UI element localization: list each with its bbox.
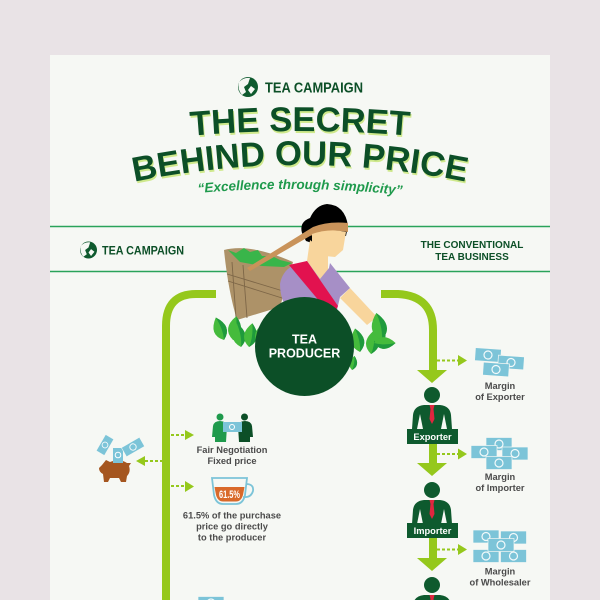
icon: fair negotiation handshake (212, 414, 253, 442)
icon: importer banknotes (471, 438, 528, 470)
icon: neck and arm (307, 240, 377, 325)
flow line: right path with arrow (381, 294, 447, 383)
figure: importer (407, 482, 458, 538)
callout: tea producer: PRODUCER (269, 346, 340, 360)
text: fair negotiation: Fixed price (207, 456, 257, 466)
arrow: dashed to fair negotiation (171, 430, 194, 440)
title (132, 107, 470, 184)
icon: piggy bank with banknotes (96, 435, 145, 482)
text: margin of exporter: Margin (485, 381, 516, 391)
icon: basket (224, 248, 293, 320)
text: margin of wholesaler (470, 566, 531, 588)
icon: sash (289, 261, 338, 310)
text: margin of exporter (475, 381, 525, 402)
tagline: “Excellence through simplicity” (198, 179, 403, 196)
figure: wholesaler (412, 577, 452, 600)
heading: the conventional tea business: TEA BUSINESS (435, 252, 509, 263)
icon: wholesaler banknotes (473, 530, 526, 562)
text: margin of importer: Margin (485, 472, 516, 482)
text: 61.5% to producer (183, 510, 281, 542)
icon: tea cup 61.5% (212, 478, 253, 504)
text: 61.5% to producer: to the producer (198, 532, 266, 542)
heading: the conventional tea business: THE CONVENTIONAL (421, 240, 523, 251)
logo: Tea Campaign column header: TEA CAMPAIGN (102, 244, 184, 258)
title: THE SECRET (189, 107, 412, 138)
callout: tea producer: TEA (292, 332, 317, 346)
logo: Tea Campaign top: TEA CAMPAIGN (265, 80, 363, 96)
title: BEHIND OUR PRICE (132, 141, 470, 184)
icon: carrying strap (247, 222, 348, 271)
arrow: dashed to margin of exporter (437, 355, 467, 366)
callout: tea producer (255, 297, 354, 396)
flow line: left path (166, 294, 216, 600)
text: 61.5% to producer: price go directly (196, 522, 269, 532)
figure: exporter: Exporter (413, 432, 452, 442)
arrow: importer to wholesaler (417, 538, 447, 571)
text: margin of wholesaler: Margin (485, 566, 516, 576)
icon: banknote bottom left (198, 596, 224, 600)
icon: face (312, 230, 346, 257)
logo: Tea Campaign top (238, 77, 363, 97)
arrow: dashed to piggy bank (136, 456, 162, 466)
text: margin of exporter: of Exporter (475, 392, 525, 402)
icon: exporter banknotes (475, 348, 524, 377)
figure: importer: Importer (414, 526, 452, 536)
panel: infographic background (50, 55, 550, 600)
icon: hair (301, 204, 348, 243)
heading: the conventional tea business (421, 240, 523, 263)
icon: shirt (280, 261, 350, 310)
comparison header band (50, 226, 550, 272)
text: fair negotiation (197, 445, 268, 466)
arrow: exporter to importer (417, 444, 447, 476)
text: fair negotiation: Fair Negotiation (197, 445, 268, 455)
arrow: dashed to tea cup (171, 481, 194, 492)
text: 61.5% to producer: 61.5% of the purchase (183, 510, 281, 520)
text: margin of importer: of Importer (475, 483, 525, 493)
logo: Tea Campaign column header (80, 242, 184, 258)
text: margin of importer (475, 472, 525, 493)
icon: tea cup 61.5%: 61.5% (219, 489, 240, 501)
illustration: tea picker (224, 204, 377, 325)
icon: leaves left (210, 315, 272, 348)
arrow: dashed to margin of wholesaler (437, 544, 467, 555)
icon: basket leaves (228, 248, 292, 267)
figure: exporter (407, 387, 458, 444)
arrow: dashed to margin of importer (437, 448, 467, 460)
icon: leaves right (348, 311, 396, 371)
text: margin of wholesaler: of Wholesaler (470, 578, 531, 588)
